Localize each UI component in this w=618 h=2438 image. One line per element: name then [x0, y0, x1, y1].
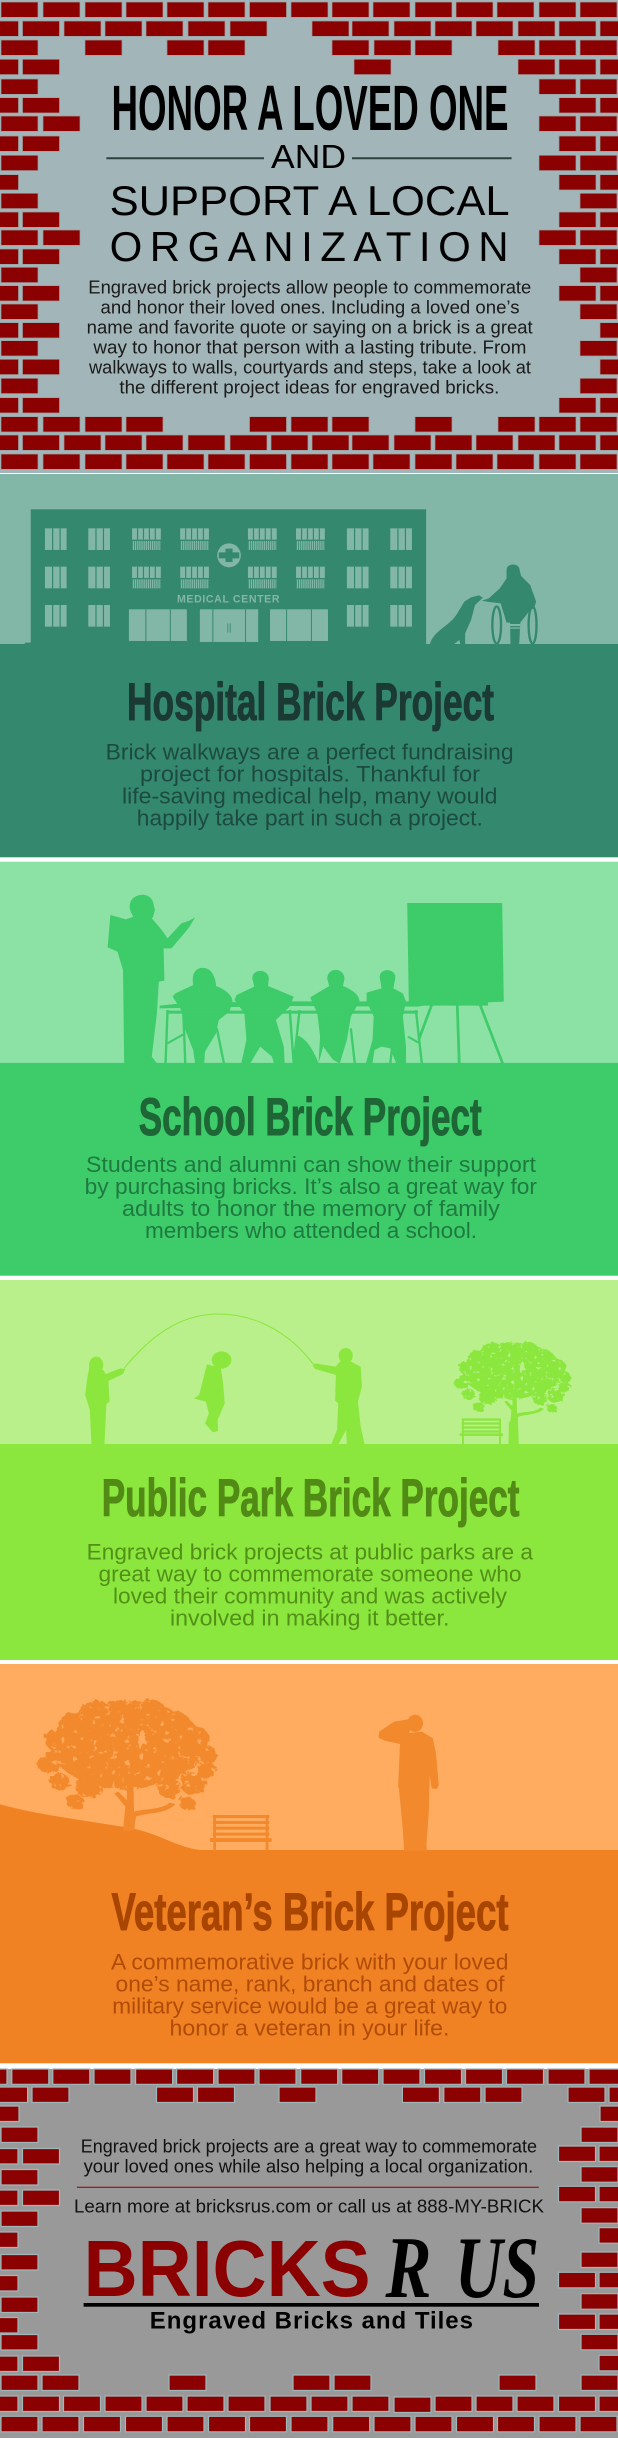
flip chart — [407, 903, 504, 1063]
tree — [37, 1699, 217, 1831]
illustration: soldier saluting by tree — [0, 1699, 439, 1851]
text: veteran: one’s name, rank, branch and dates of — [116, 1971, 505, 1996]
hill — [0, 1804, 199, 1851]
panel: hospital — [0, 474, 618, 857]
panel: footer — [0, 2069, 618, 2438]
text: hospital: Brick walkways are a perfect fundraising — [106, 739, 514, 764]
logo: bricks r us — [84, 2220, 539, 2334]
building — [25, 509, 426, 645]
tree — [454, 1342, 571, 1445]
brick border: intro — [0, 2, 618, 469]
intro text: Engraved brick projects allow people to commemorate — [88, 277, 531, 297]
logo: bricks r us: R — [385, 2220, 432, 2317]
text: veteran: A commemorative brick with your loved — [111, 1949, 508, 1974]
saluting soldier — [378, 1715, 439, 1851]
footer text: Engraved brick projects are a great way to commemorate — [81, 2136, 537, 2156]
footer text — [74, 2136, 544, 2216]
illustration: jump rope in park — [85, 1314, 571, 1445]
panel: public park — [0, 1280, 618, 1660]
title: organization: ORGANIZATION — [110, 223, 509, 270]
text: hospital: project for hospitals. Thankful for — [140, 761, 480, 786]
title: and with rules: AND — [271, 138, 346, 175]
text: school: members who attended a school. — [145, 1218, 477, 1243]
jump rope — [124, 1314, 313, 1368]
text: hospital: happily take part in such a project. — [137, 805, 483, 830]
logo: bricks r us: BRICKS — [84, 2224, 371, 2313]
intro text: and honor their loved ones. Including a loved one’s — [100, 297, 520, 317]
text: public park: Engraved brick projects at public parks are a — [87, 1539, 534, 1564]
dog — [430, 595, 483, 645]
jumping child — [194, 1351, 231, 1432]
text: public park — [87, 1539, 534, 1630]
intro text: name and favorite quote or saying on a brick is a great — [87, 317, 533, 337]
text: school: by purchasing bricks. It’s also a great way for — [85, 1174, 537, 1199]
desks — [160, 1001, 424, 1063]
panel: school — [0, 862, 618, 1276]
teacher — [108, 895, 195, 1063]
logo: bricks r us: Engraved Bricks and Tiles — [150, 2307, 473, 2334]
text: veteran: honor a veteran in your life. — [170, 2015, 449, 2040]
students — [173, 968, 406, 1063]
brick border: footer — [0, 2069, 618, 2432]
panel: intro — [0, 0, 618, 473]
text: school — [85, 1152, 537, 1243]
text: public park: great way to commemorate someone who — [98, 1561, 522, 1586]
footer text: your loved ones while also helping a local organization. — [84, 2156, 533, 2176]
text: public park: involved in making it better. — [170, 1605, 449, 1630]
intro text: walkways to walls, courtyards and steps, take a look at — [88, 357, 531, 377]
intro text — [87, 277, 533, 397]
intro text: the different project ideas for engraved bricks. — [119, 377, 499, 397]
man — [313, 1348, 365, 1445]
title: support a local: SUPPORT A LOCAL — [110, 177, 510, 224]
illustration: classroom — [108, 895, 504, 1063]
panel: veteran — [0, 1664, 618, 2063]
text: public park: loved their community and was actively — [113, 1583, 507, 1608]
text: hospital: life-saving medical help, many would — [122, 783, 497, 808]
person in wheelchair — [482, 564, 537, 645]
text: school: Students and alumni can show their support — [86, 1152, 536, 1177]
bench — [210, 1815, 272, 1851]
bench — [460, 1418, 503, 1445]
text: school: adults to honor the memory of family — [122, 1196, 500, 1221]
building sign: MEDICAL CENTER — [177, 594, 280, 606]
illustration: hospital building and wheelchair user with dog — [25, 509, 537, 645]
text: veteran: military service would be a great way to — [112, 1993, 507, 2018]
footer text: Learn more at bricksrus.com or call us at 888-MY-BRICK — [74, 2196, 544, 2216]
intro text: way to honor that person with a lasting tribute. From — [92, 337, 526, 357]
logo: bricks r us: US — [455, 2220, 539, 2317]
text: hospital — [106, 739, 514, 830]
text: veteran — [111, 1949, 508, 2040]
girl — [85, 1357, 125, 1445]
